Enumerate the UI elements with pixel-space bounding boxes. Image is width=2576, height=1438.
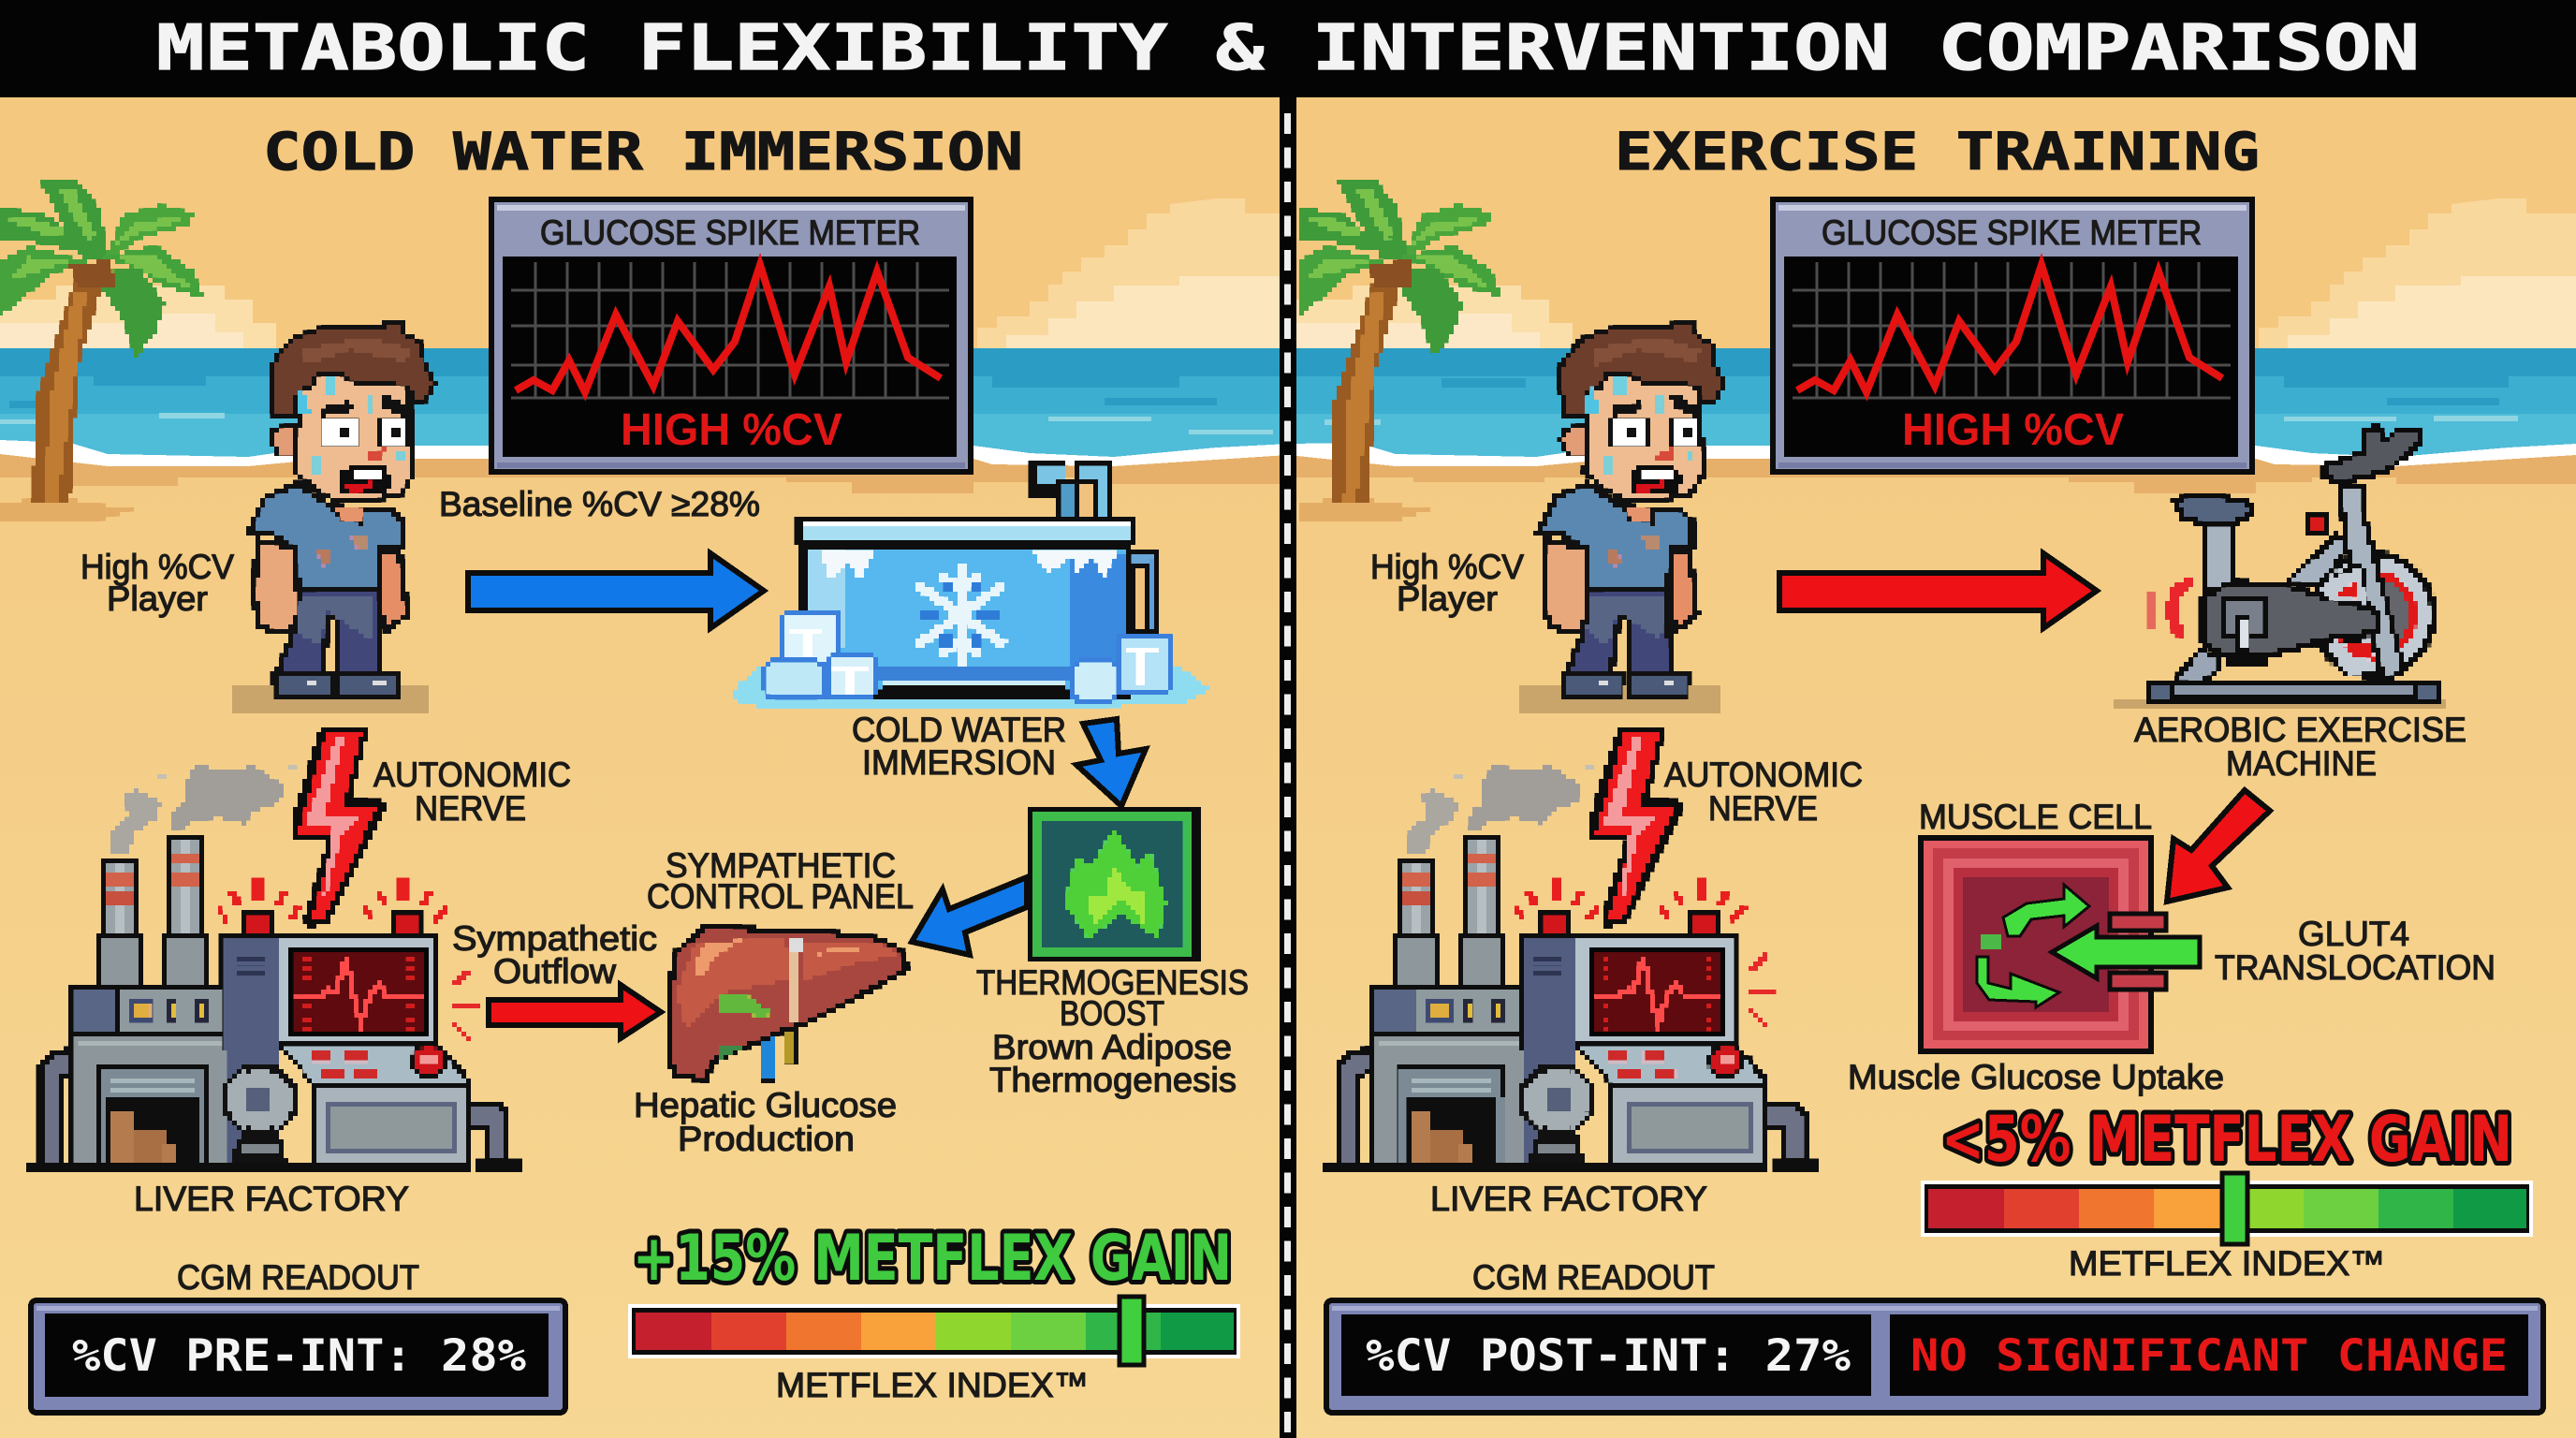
- cgm readout box: %CV PRE-INT: 28%: [72, 1330, 526, 1382]
- label: cgm readout: CGM READOUT: [1472, 1258, 1715, 1297]
- label: high CV player: High %CV: [80, 548, 234, 586]
- glucose spike meter: GLUCOSE SPIKE METER: [540, 213, 920, 252]
- icon: palm tree: [1298, 178, 1502, 521]
- icon: exercise bike: [2113, 426, 2446, 709]
- label: muscle glucose uptake: Muscle Glucose Uptake: [1848, 1058, 2224, 1096]
- label: glut4 translocation: GLUT4: [2298, 915, 2409, 953]
- label: cgm readout: CGM READOUT: [177, 1258, 419, 1297]
- arrow: player to bike: [1779, 553, 2097, 628]
- label: aerobic exercise machine: MACHINE: [2226, 744, 2377, 783]
- label: autonomic nerve: [1664, 756, 1863, 828]
- label: sympathetic outflow: [452, 919, 657, 990]
- icon: high CV player: [231, 323, 433, 712]
- title bar: [0, 0, 2576, 97]
- label: sympathetic control panel: SYMPATHETIC: [666, 846, 896, 885]
- icon: high CV player: [1521, 323, 1723, 712]
- label: cold water immersion: COLD WATER: [852, 711, 1066, 749]
- label: high CV player: [80, 548, 234, 618]
- label: high CV player: Player: [1397, 580, 1498, 618]
- label: aerobic exercise machine: AEROBIC EXERCISE: [2134, 711, 2466, 749]
- label: hepatic glucose production: [634, 1086, 897, 1158]
- metflex index gauge: [1921, 1173, 2533, 1244]
- label: muscle cell: MUSCLE CELL: [1919, 798, 2152, 836]
- metflex index gauge: [628, 1297, 1240, 1365]
- icon: autonomic nerve bolt: [291, 728, 385, 929]
- glucose spike meter: GLUCOSE SPIKE METER: [1822, 213, 2202, 252]
- icon: palm tree: [0, 178, 204, 521]
- label: hepatic glucose production: Hepatic Glucose: [634, 1086, 897, 1124]
- label: liver factory: LIVER FACTORY: [134, 1180, 409, 1218]
- label: baseline CV: Baseline %CV ≥28%: [439, 485, 760, 523]
- title: METABOLIC FLEXIBILITY & INTERVENTION COMPARISON: [156, 11, 2420, 84]
- icon: autonomic nerve bolt: [1588, 728, 1682, 929]
- label: thermogenesis boost: Brown Adipose: [992, 1028, 1232, 1066]
- panel: exercise training: [1298, 122, 2543, 1413]
- heading: exercise training: EXERCISE TRAINING: [1615, 122, 2260, 182]
- icon: green flame: [1027, 806, 1199, 961]
- label: cold water immersion: [852, 711, 1066, 782]
- label: sympathetic outflow: Sympathetic: [452, 919, 657, 958]
- arrow: top recycling: [2003, 885, 2089, 936]
- label: sympathetic outflow: Outflow: [493, 952, 616, 990]
- glucose spike meter: [491, 199, 971, 472]
- arrow: bottom recycling: [1977, 957, 2059, 1007]
- label: autonomic nerve: NERVE: [415, 789, 526, 828]
- label: metflex index: METFLEX INDEX™: [776, 1366, 1089, 1404]
- panel divider: [1280, 97, 1296, 1438]
- icon: ice bath: [730, 462, 1210, 709]
- label: sympathetic control panel: CONTROL PANEL: [647, 877, 914, 916]
- label: aerobic exercise machine: [2134, 711, 2466, 783]
- glucose spike meter: HIGH %CV: [621, 405, 842, 455]
- glucose spike meter: HIGH %CV: [1902, 405, 2124, 455]
- arrow: machine to muscle cell: [2167, 790, 2270, 902]
- label: high CV player: [1370, 548, 1524, 618]
- icon: liver: [669, 928, 907, 1082]
- panel: cold water immersion: [0, 122, 1249, 1413]
- icon: liver factory: [27, 764, 520, 1170]
- label: hepatic glucose production: Production: [678, 1120, 855, 1158]
- label: cold water immersion: IMMERSION: [862, 743, 1056, 782]
- cgm readout box: NO SIGNIFICANT CHANGE: [1910, 1330, 2508, 1382]
- cgm readout box: [31, 1300, 565, 1413]
- icon: liver factory: [1325, 764, 1818, 1170]
- label: sympathetic control panel: [647, 846, 914, 916]
- arrow: glut4 uptake: [2052, 926, 2200, 978]
- arrow: immersion to thermogenesis: [1076, 719, 1146, 806]
- label: glut4 translocation: [2215, 915, 2496, 987]
- label: metflex index: METFLEX INDEX™: [2069, 1244, 2385, 1283]
- heading: cold water immersion: COLD WATER IMMERSION: [263, 122, 1023, 182]
- glucose spike meter: [1773, 199, 2252, 472]
- label: glut4 translocation: TRANSLOCATION: [2215, 948, 2496, 987]
- label: high CV player: High %CV: [1370, 548, 1524, 586]
- cgm readout box: %CV POST-INT: 27%: [1366, 1330, 1851, 1382]
- icon: muscle cell: [1921, 838, 2200, 1051]
- label: thermogenesis boost: Thermogenesis: [989, 1061, 1237, 1099]
- label: high CV player: Player: [107, 580, 208, 618]
- label: autonomic nerve: NERVE: [1708, 789, 1818, 828]
- label: thermogenesis boost: [976, 963, 1249, 1099]
- arrow: thermogenesis to liver: [912, 877, 1027, 955]
- metflex gain headline: +15% METFLEX GAIN: [633, 1222, 1232, 1296]
- label: autonomic nerve: AUTONOMIC: [1664, 756, 1863, 794]
- label: liver factory: LIVER FACTORY: [1430, 1180, 1707, 1218]
- label: thermogenesis boost: BOOST: [1060, 994, 1164, 1033]
- arrow: factory to liver: [489, 985, 661, 1038]
- arrow: player to ice bath: [468, 553, 764, 628]
- label: thermogenesis boost: THERMOGENESIS: [976, 963, 1249, 1002]
- label: autonomic nerve: [373, 756, 571, 828]
- label: autonomic nerve: AUTONOMIC: [373, 756, 571, 794]
- cgm readout box: [1326, 1300, 2543, 1413]
